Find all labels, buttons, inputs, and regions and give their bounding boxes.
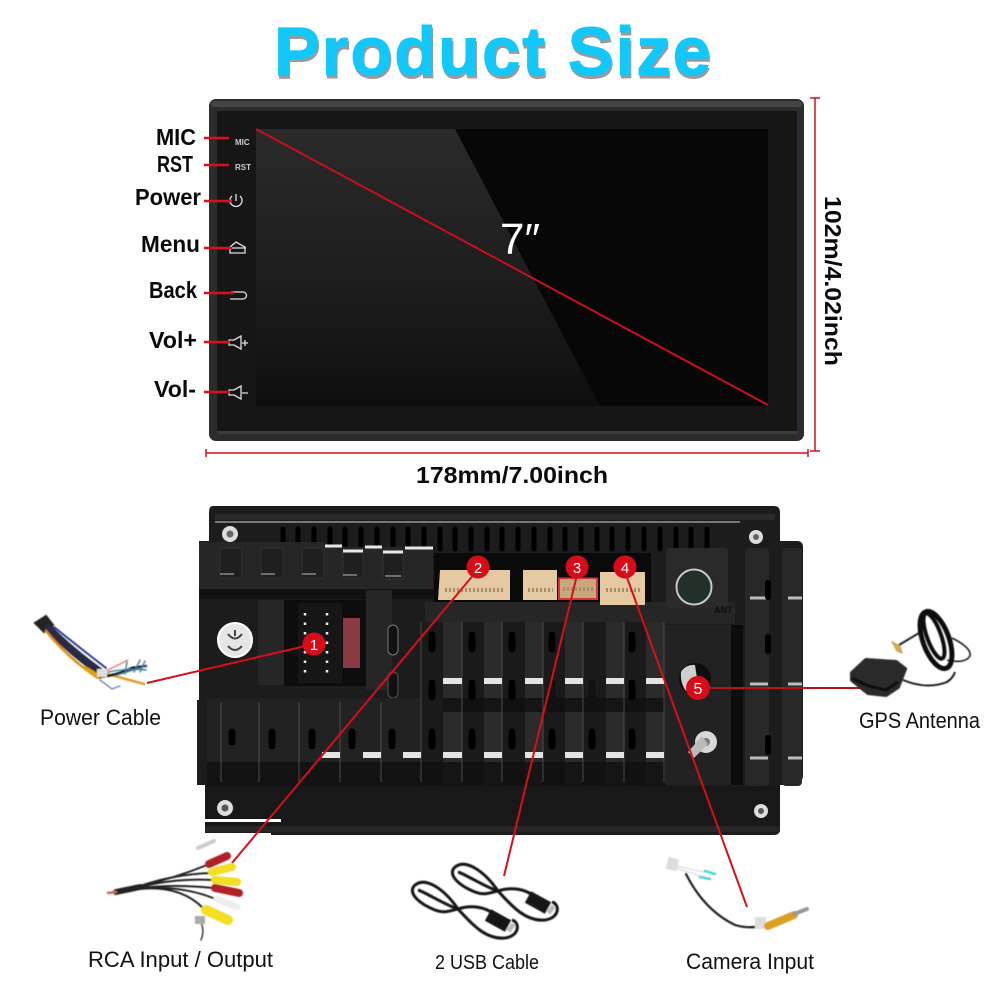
icon: USB cables	[412, 864, 557, 938]
CE mark	[218, 623, 252, 657]
marker 2: 2	[474, 560, 482, 577]
label: MIC: MIC	[156, 124, 196, 150]
icon: MIC: MIC	[235, 138, 250, 147]
panel: rear of head unit	[197, 506, 803, 835]
label: Camera Input: Camera Input	[686, 949, 814, 974]
icon: RCA cable	[108, 841, 239, 940]
top clip band	[199, 542, 434, 599]
label: Menu: Menu	[141, 231, 200, 257]
diagonal line	[256, 129, 768, 405]
label: Vol-: Vol-	[154, 376, 196, 402]
marker 1: 1	[310, 637, 318, 654]
connector 3	[558, 578, 598, 600]
connector 4	[600, 572, 645, 605]
icon: RST: RST	[235, 163, 251, 172]
connector 2	[438, 570, 510, 600]
label: Vol+: Vol+	[149, 327, 197, 353]
button leader lines	[204, 138, 234, 392]
cable two	[452, 864, 557, 920]
height dimension	[810, 98, 820, 451]
screen	[256, 129, 768, 406]
icon: volume up	[229, 336, 248, 349]
screen size label: 7″	[500, 215, 540, 264]
connector bay	[425, 553, 735, 624]
line: GPS	[698, 687, 864, 689]
power socket recess	[258, 590, 398, 698]
rib slots	[232, 635, 632, 746]
label: RST: RST	[157, 151, 193, 177]
label: GPS Antenna: GPS Antenna	[859, 708, 981, 733]
chassis	[197, 506, 803, 835]
title: Product Size	[274, 13, 711, 90]
height label: 102m/4.02inch	[820, 196, 846, 366]
white strip	[203, 819, 281, 822]
line: RCA	[232, 573, 475, 863]
icon: GPS antenna	[852, 607, 970, 695]
title: Product Size	[275, 16, 712, 93]
antenna panel	[665, 625, 743, 785]
line: USB	[504, 575, 577, 876]
line: power cable	[147, 644, 314, 683]
label: Power Cable: Power Cable	[40, 705, 161, 730]
line: camera	[625, 572, 747, 907]
marker 2	[466, 556, 490, 578]
width label: 178mm/7.00inch	[416, 462, 608, 488]
label: RCA Input / Output: RCA Input / Output	[88, 947, 273, 972]
side bracket	[745, 548, 802, 786]
marker 4: 4	[621, 560, 629, 577]
label: Back: Back	[149, 277, 197, 303]
label: Power: Power	[135, 184, 201, 210]
icon: home	[229, 242, 246, 253]
top vent slots	[283, 529, 707, 549]
panel: front of head unit	[209, 99, 804, 441]
width dimension	[206, 449, 808, 457]
highlight box around port 3	[559, 578, 597, 599]
icon: power	[230, 194, 242, 206]
marker 1	[302, 632, 326, 656]
numbered markers	[302, 556, 710, 700]
connector middle	[523, 570, 557, 600]
label: 2 USB Cable: 2 USB Cable	[435, 952, 539, 974]
callout lines	[147, 572, 864, 907]
marker 4	[614, 556, 636, 578]
icon: volume down	[229, 386, 248, 399]
button labels	[135, 124, 201, 402]
antenna block: ANT	[714, 605, 733, 615]
marker 3	[566, 556, 588, 578]
icon: camera cable	[666, 857, 807, 929]
icon: back	[230, 292, 246, 299]
front button icons	[229, 138, 251, 399]
lower ribs	[207, 622, 667, 786]
mounting screws	[217, 526, 768, 818]
marker 5	[686, 676, 710, 700]
marker 3: 3	[573, 560, 581, 577]
rib highlights	[322, 681, 664, 755]
icon: power cable	[35, 616, 146, 689]
marker 5: 5	[694, 681, 703, 698]
antenna block	[666, 548, 733, 615]
cable one	[412, 882, 517, 938]
